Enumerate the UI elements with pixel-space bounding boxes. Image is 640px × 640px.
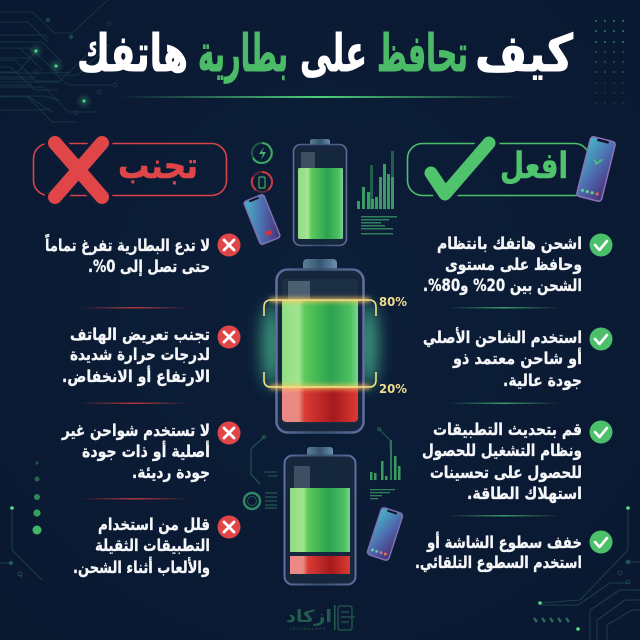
item: original charger: جودة عالية. bbox=[503, 371, 582, 391]
item: temperature: الارتفاع أو الانخفاض. bbox=[62, 366, 210, 387]
title underline bbox=[120, 96, 520, 98]
item: update apps bbox=[422, 420, 612, 504]
icon: charging ring bbox=[252, 143, 272, 163]
icon: low battery ring bbox=[252, 172, 272, 192]
item: full discharge: حتى تصل إلى 0%. bbox=[88, 257, 210, 276]
circuit lines: around batteries bbox=[251, 428, 390, 484]
logo bbox=[286, 605, 355, 631]
item: chargers: لا تستخدم شواحن غير bbox=[61, 421, 210, 441]
title: على bbox=[300, 25, 367, 84]
item: temperature: لدرجات حرارة شديدة bbox=[70, 345, 210, 365]
logo: ازكاد bbox=[286, 607, 332, 627]
item: temperature bbox=[62, 325, 240, 387]
panel: avoid badge bbox=[34, 143, 226, 197]
label: 80%: 80% bbox=[379, 294, 407, 309]
item: dim screen bbox=[415, 530, 612, 573]
item: original charger: أو شاحن معتمد ذو bbox=[452, 348, 582, 369]
item: heavy apps: قلل من استخدام bbox=[98, 515, 210, 535]
glow bbox=[262, 303, 378, 387]
panel: do badge bbox=[408, 143, 590, 196]
icon: cross bbox=[218, 234, 240, 256]
item: temperature: تجنب تعريض الهاتف bbox=[70, 325, 210, 345]
title bbox=[77, 25, 573, 84]
item: charge regularly bbox=[423, 234, 612, 296]
title: هاتفك bbox=[77, 25, 188, 84]
item: update apps: ونظام التشغيل للحصول bbox=[422, 441, 582, 461]
label: 20%: 20% bbox=[379, 381, 407, 396]
dot grid: top right bbox=[595, 20, 624, 104]
item: full discharge: لا تدع البطارية تفرغ تماماً bbox=[45, 233, 210, 256]
circuit pattern: bottom left bbox=[0, 461, 42, 580]
title: كيف bbox=[475, 25, 573, 84]
item: heavy apps: والألعاب أثناء الشحن. bbox=[73, 557, 210, 578]
phone: bottom right bbox=[366, 506, 404, 562]
bracket glow bbox=[270, 300, 370, 387]
circuit pattern: top left bbox=[0, 0, 117, 122]
bar chart: bottom bbox=[370, 440, 400, 499]
item: chargers: أصلية أو ذات جودة bbox=[82, 441, 210, 462]
avoid list bbox=[45, 233, 240, 578]
dots column bbox=[32, 461, 42, 534]
icon: check bbox=[590, 328, 612, 350]
item: update apps: قم بتحديث التطبيقات bbox=[433, 420, 582, 439]
logo: TECHNOLOGY bbox=[290, 627, 326, 631]
item: original charger bbox=[423, 327, 612, 391]
item: charge regularly: الشحن بين 20% و80%. bbox=[423, 276, 582, 296]
circuit pattern: bottom right bbox=[534, 506, 640, 640]
icon: big red cross bbox=[55, 143, 102, 197]
icon: cross bbox=[218, 516, 240, 538]
item: full discharge bbox=[45, 233, 240, 276]
icon: cross bbox=[218, 326, 240, 348]
item: heavy apps bbox=[73, 515, 240, 578]
panel: avoid badge: تجنب bbox=[118, 146, 198, 187]
icon: big green check bbox=[431, 143, 489, 194]
icon: check bbox=[590, 420, 612, 444]
bar chart: top bbox=[357, 151, 397, 234]
title: بطارية bbox=[198, 25, 288, 84]
bracket: 80% to 20% bbox=[264, 300, 376, 387]
icon: check bbox=[590, 234, 612, 256]
item: update apps: للحصول على تحسينات bbox=[430, 463, 582, 483]
item: chargers bbox=[61, 421, 240, 483]
item: charge regularly: اشحن هاتفك بانتظام bbox=[437, 234, 582, 254]
panel: do badge: افعل bbox=[500, 146, 568, 187]
battery: bottom, low bbox=[284, 447, 356, 584]
item: dim screen: استخدم السطوع التلقائي. bbox=[415, 553, 582, 573]
battery: top, charged bbox=[294, 139, 346, 246]
battery: middle, 20–80% range bbox=[262, 259, 407, 432]
glowing nodes: top left bbox=[31, 46, 89, 106]
icon: phone with check bbox=[575, 135, 617, 203]
item: heavy apps: التطبيقات الثقيلة bbox=[95, 536, 210, 555]
item: chargers: جودة رديئة. bbox=[132, 463, 210, 483]
icon: phone with low battery bbox=[242, 193, 282, 246]
icon: cross bbox=[218, 422, 240, 444]
item: dim screen: خفف سطوع الشاشة أو bbox=[426, 532, 582, 553]
icon: check bbox=[590, 530, 612, 554]
item: update apps: استهلاك الطاقة. bbox=[467, 484, 582, 504]
title: تحافظ bbox=[377, 25, 468, 84]
item: original charger: استخدم الشاحن الأصلي bbox=[423, 327, 582, 348]
ring gauge: bottom left bbox=[244, 493, 277, 509]
do list bbox=[415, 234, 612, 573]
item: charge regularly: وحافظ على مستوى bbox=[445, 255, 582, 275]
